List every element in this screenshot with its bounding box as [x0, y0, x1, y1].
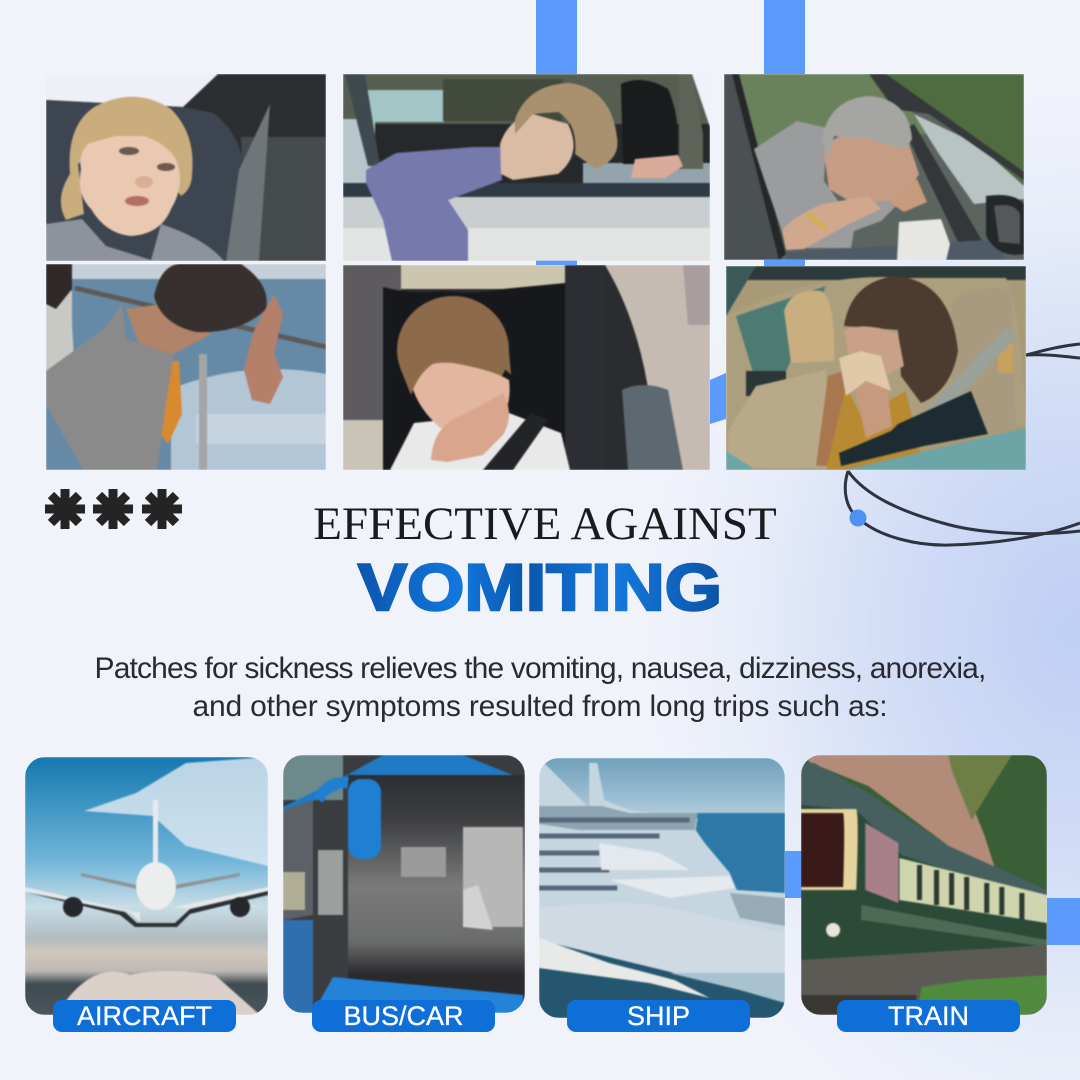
panel: bus/car — [283, 755, 525, 1032]
body text: Patches for sickness relieves the vomiting, nausea, dizziness, anorexia, — [95, 652, 985, 685]
train photo — [801, 755, 1047, 1015]
body text — [95, 652, 985, 723]
label: train — [837, 1000, 1020, 1032]
icon: three asterisks — [45, 489, 182, 529]
label: aircraft — [53, 1000, 236, 1032]
label: ship: SHIP — [627, 1001, 690, 1031]
label: bus/car — [312, 1000, 495, 1032]
photo: boy in car seat — [46, 74, 326, 261]
bus photo — [283, 755, 525, 1013]
heading: effective against: EFFECTIVE AGAINST — [313, 498, 777, 550]
aircraft photo — [25, 757, 268, 1015]
label: bus/car: BUS/CAR — [343, 1001, 464, 1031]
panel: aircraft — [25, 757, 268, 1032]
panel: train — [801, 755, 1047, 1032]
body text: and other symptoms resulted from long trips such as: — [193, 690, 887, 723]
photo: woman with tissue in car — [726, 266, 1026, 470]
photo: girl leaning out of car window — [343, 74, 710, 261]
curved line decoration — [844, 342, 1080, 547]
panel: ship — [539, 758, 785, 1032]
photo: man coughing from car window — [724, 74, 1024, 260]
ship photo — [539, 758, 785, 1018]
label: ship — [567, 1000, 750, 1032]
photo: woman leaning over ship rail — [46, 264, 326, 470]
label: aircraft: AIRCRAFT — [77, 1001, 212, 1031]
label: train: TRAIN — [888, 1001, 969, 1031]
photo: boy covering mouth in car — [343, 265, 710, 470]
